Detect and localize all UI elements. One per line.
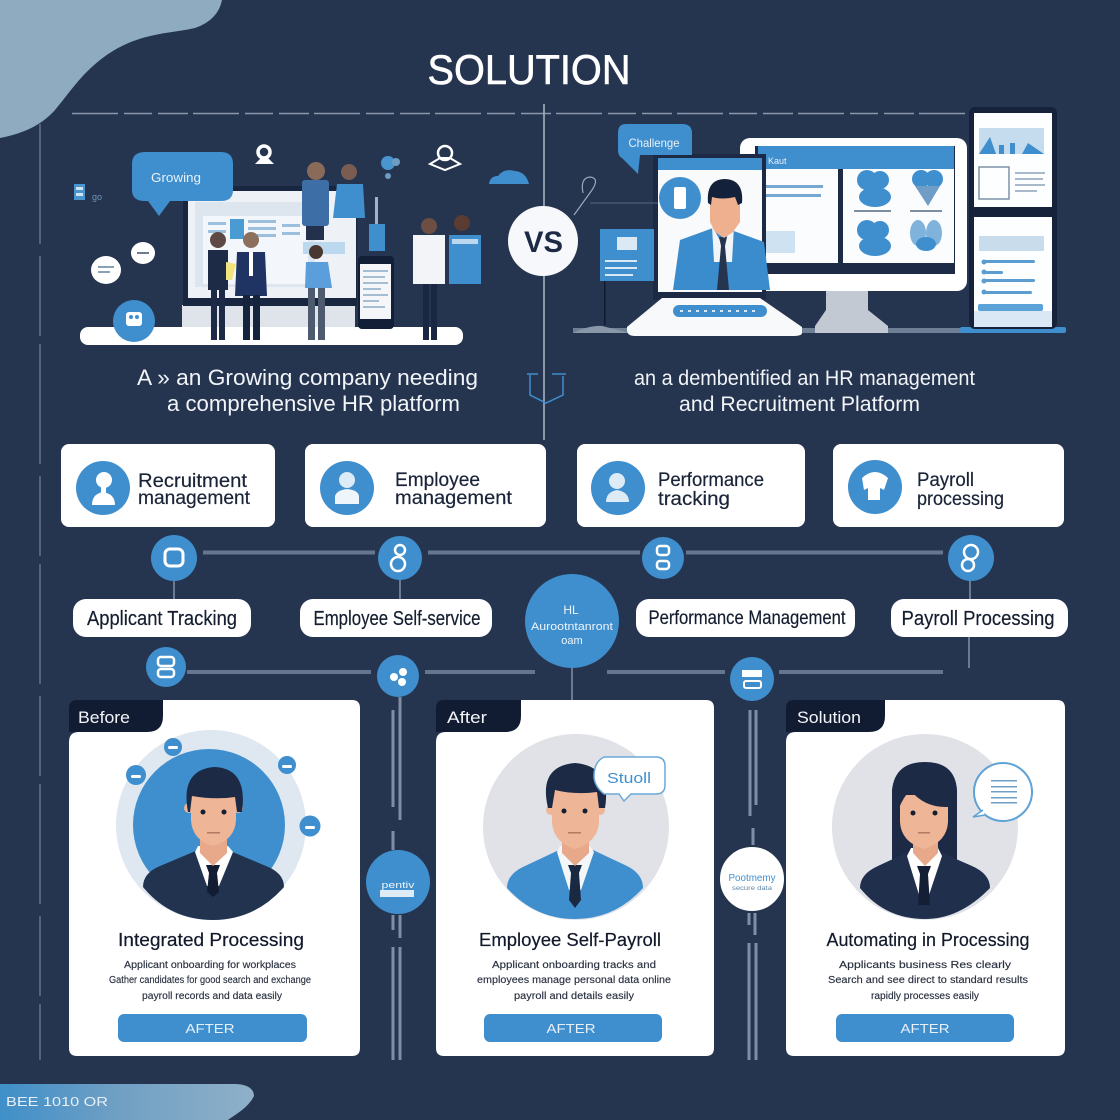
tab: solution: Solution: [797, 708, 861, 727]
tab: solution: [786, 700, 885, 732]
balloon line icon: [574, 177, 596, 215]
small icons: [258, 146, 270, 158]
central hub circle: [525, 574, 619, 668]
feature card: performance: [577, 444, 805, 527]
node between after and solution: Pootmemy: [728, 873, 776, 884]
VS badge: [508, 206, 578, 276]
card: before: Integrated Processing: [118, 930, 304, 950]
card: solution: Applicants business Res clearly: [839, 960, 1011, 971]
sign card: [600, 229, 654, 281]
illustration: growing company: go: [92, 192, 102, 202]
speech bubble: chat: [974, 763, 1032, 821]
pill: performance management: [636, 599, 855, 637]
connector node icons lower row: [146, 647, 774, 701]
portrait: [483, 734, 669, 920]
card: after: AFTER: [546, 1021, 596, 1036]
bottom-left footer blob: [0, 1084, 254, 1120]
title: SOLUTION: [428, 46, 630, 93]
tab: after: [436, 700, 521, 732]
pill: applicant tracking: Applicant Tracking: [87, 608, 237, 630]
connector lines: [187, 552, 943, 672]
presenter: [673, 228, 770, 290]
node between after and solution: secure data: [732, 886, 773, 892]
top-left decorative blob: [0, 0, 222, 138]
feature card: recruitment: [61, 444, 275, 527]
portrait: Stuoll: [607, 770, 651, 787]
desk line: [573, 328, 1063, 333]
feature card: employee: management: [395, 488, 513, 509]
card: solution: AFTER: [900, 1021, 950, 1036]
lamp: [369, 224, 385, 251]
laptop frame: [653, 154, 766, 300]
card: after: employees manage personal data online: [477, 975, 671, 986]
feature card: recruitment: Recruitment: [138, 471, 248, 492]
caption: left: [137, 365, 478, 416]
central hub circle: HL: [563, 603, 579, 617]
node between after and solution: [719, 846, 785, 912]
portrait: [832, 734, 1032, 920]
people front: [210, 232, 226, 248]
node between before and after: pentiv: [382, 880, 415, 890]
tab: before: Before: [78, 708, 130, 727]
central hub circle: oam: [561, 635, 583, 647]
person group top: [307, 162, 325, 180]
speech bubble: Challenge: Challenge: [628, 136, 680, 150]
illustration: growing company: [74, 146, 529, 345]
caption: right: [634, 367, 975, 416]
speech bubble: Growing: [132, 152, 233, 216]
people right: [421, 218, 437, 234]
card: before: AFTER: [186, 1021, 234, 1036]
feature card: employee: Employee: [395, 470, 480, 491]
feature card: employee: [305, 444, 546, 527]
feature card: performance: tracking: [658, 489, 730, 510]
card: solution: Automating in Processing: [826, 930, 1030, 950]
feature card: payroll: Payroll: [917, 470, 974, 491]
tab: before: [69, 700, 163, 732]
pill: employee self-service: [300, 599, 492, 637]
feature card: payroll: processing: [917, 489, 1004, 510]
illustration: dedicated HR platform: [573, 107, 1066, 336]
bottom-left footer blob: BEE 1010 OR: [6, 1094, 108, 1109]
feature card: recruitment: management: [138, 488, 251, 509]
card: before: payroll records and data easily: [142, 991, 282, 1002]
feature card: payroll: [833, 444, 1064, 527]
pill: payroll processing: [891, 599, 1068, 637]
card: after: Employee Self-Payroll: [479, 930, 661, 950]
platform base: [80, 327, 463, 345]
tablets: [969, 107, 1057, 219]
caption: right: and Recruitment Platform: [679, 393, 920, 416]
monitor: [740, 138, 967, 291]
central hub circle: Aurootntanront: [531, 621, 613, 633]
card: after: [436, 700, 714, 1056]
card: before: Gather candidates for good search and exchange: [109, 975, 311, 986]
speech bubble: Challenge: [618, 124, 692, 174]
card: before: [69, 700, 360, 1056]
chart blobs: [857, 170, 943, 256]
pill: payroll processing: Payroll Processing: [902, 608, 1054, 630]
caption: right: an a dembentified an HR management: [634, 367, 975, 390]
portrait: [116, 730, 320, 920]
connector node icons upper row: [151, 535, 994, 581]
feature card: performance: Performance: [658, 470, 764, 491]
card: after: payroll and details easily: [514, 991, 634, 1002]
card: after: Applicant onboarding tracks and: [492, 960, 656, 971]
stethoscope icon: [527, 374, 566, 403]
speech bubble: Growing: Growing: [151, 170, 201, 185]
card: solution: rapidly processes easily: [871, 991, 979, 1002]
pill: applicant tracking: [73, 599, 251, 637]
speech bubble: Stuoll: [594, 757, 665, 801]
illustration: dedicated HR platform: Kaut: [768, 156, 787, 166]
monitor stand: [815, 291, 888, 333]
caption: left: A » an Growing company needing: [137, 365, 478, 390]
pill: performance management: Performance Management: [648, 608, 846, 629]
node between before and after: [366, 850, 430, 914]
frame lines: [40, 104, 1000, 1060]
card: solution: Search and see direct to standard results: [828, 975, 1028, 986]
card: before: Applicant onboarding for workplaces: [124, 960, 296, 971]
laptop keyboard: [627, 298, 802, 336]
laptop: [182, 305, 355, 327]
pill: employee self-service: Employee Self-service: [314, 608, 480, 630]
phone: [358, 256, 394, 329]
caption: left: a comprehensive HR platform: [167, 391, 460, 416]
tab: after: After: [447, 708, 487, 727]
VS badge: VS: [524, 226, 563, 259]
card: solution: [786, 700, 1065, 1056]
